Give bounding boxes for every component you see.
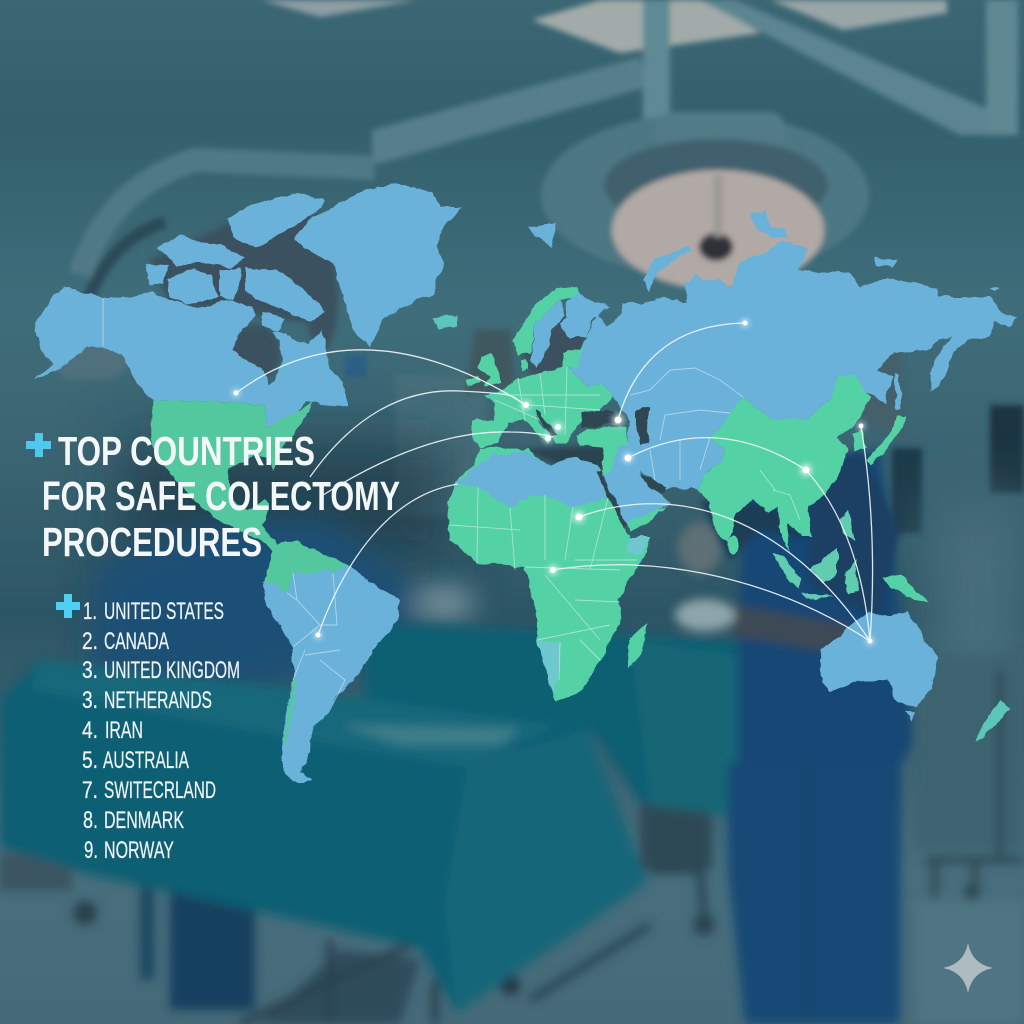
land: Australia — [820, 610, 937, 722]
land: Iceland — [432, 315, 457, 330]
arc: South America to West Africa — [318, 484, 458, 635]
land: New Zealand — [975, 700, 1010, 742]
country ranking list: 4. — [82, 717, 98, 744]
land: Sri Lanka — [727, 536, 739, 554]
land: Indonesia and Pacific islands — [773, 510, 858, 600]
land: southern US, Mexico and Central America green — [150, 400, 313, 553]
land: South America blue — [263, 540, 400, 783]
world map — [33, 183, 1018, 783]
land: northern Africa blue — [452, 452, 608, 508]
land masses with rough coastlines — [33, 183, 1018, 783]
icon: title medical cross — [26, 433, 51, 457]
arc: China to Australia — [806, 470, 870, 641]
floor, carts and legs — [0, 853, 72, 891]
surgeon on the right — [728, 763, 901, 1024]
arc: Caucasus to Russia — [618, 323, 745, 420]
land: Eurasia blue — [567, 242, 1018, 525]
country ranking list: AUSTRALIA — [103, 747, 189, 774]
land: Canadian Arctic islands — [146, 193, 325, 333]
land: Sakhalin and Arctic islands — [528, 212, 1000, 410]
land: Namibia and Somalia tint — [537, 537, 650, 692]
inland seas — [535, 407, 667, 529]
country ranking list: 1. — [83, 598, 97, 625]
country ranking list: NETHERANDS — [104, 687, 212, 714]
country ranking list: 8. — [83, 807, 98, 834]
country ranking list: NORWAY — [104, 837, 174, 864]
glowing location dots — [232, 319, 874, 645]
land: Greenland — [293, 183, 462, 348]
connection arcs — [236, 323, 873, 641]
country borders — [103, 298, 800, 710]
arc: Iran to China — [628, 438, 806, 470]
arc: Central America to Europe — [310, 391, 525, 477]
land: Sweden and Finland — [530, 293, 610, 368]
title: TOP COUNTRIES — [58, 428, 315, 474]
land: North America blue — [33, 287, 348, 427]
land: Denmark and Baltics — [520, 348, 582, 372]
land: Africa green — [447, 447, 650, 702]
arc: Korea to Australia — [861, 426, 873, 641]
land: Turkey and Levant — [577, 427, 628, 475]
land: Italy — [518, 412, 553, 443]
land: Madagascar — [628, 623, 648, 668]
country ranking list: CANADA — [104, 628, 169, 655]
arc: United States to Europe — [236, 350, 526, 405]
country ranking list: DENMARK — [104, 807, 184, 834]
icon: four-point sparkle watermark — [943, 943, 993, 993]
land: Korea and Japan — [853, 417, 907, 465]
country ranking list — [82, 598, 240, 864]
surgeon arm and gloves — [730, 605, 850, 655]
back table drape — [365, 622, 774, 817]
arc: Sudan to Australia — [579, 504, 870, 641]
land: China, India and Southeast Asia green — [698, 375, 870, 553]
country ranking list: UNITED STATES — [104, 598, 224, 625]
land: United Kingdom and Ireland — [467, 353, 503, 387]
country ranking list: 3. — [82, 687, 98, 714]
icon: list medical cross — [56, 594, 80, 618]
country ranking list: 9. — [84, 837, 98, 864]
land: continental Europe green — [472, 367, 613, 447]
title: FOR SAFE COLECTOMY — [42, 473, 400, 519]
country ranking list: 7. — [82, 777, 98, 804]
title: PROCEDURES — [42, 519, 262, 565]
country ranking list: SWITECRLAND — [104, 777, 216, 804]
land: New Guinea — [883, 575, 930, 603]
arc: Caribbean to Balkans — [320, 432, 553, 497]
land: Scandinavia Norway — [513, 287, 580, 355]
title — [42, 428, 400, 565]
main table drape — [0, 660, 647, 1013]
equipment on the right — [915, 655, 1024, 850]
arc: Congo to Australia — [553, 565, 870, 641]
dark sea shadows behind the map — [150, 215, 905, 620]
land: southern Arabia green — [625, 503, 670, 531]
country ranking list: IRAN — [105, 717, 143, 744]
country ranking list: UNITED KINGDOM — [104, 657, 240, 684]
country ranking list: 2. — [82, 628, 98, 655]
land: northern South America and Chile green — [263, 540, 347, 745]
country ranking list: 5. — [82, 747, 98, 774]
country ranking list: 3. — [82, 657, 98, 684]
